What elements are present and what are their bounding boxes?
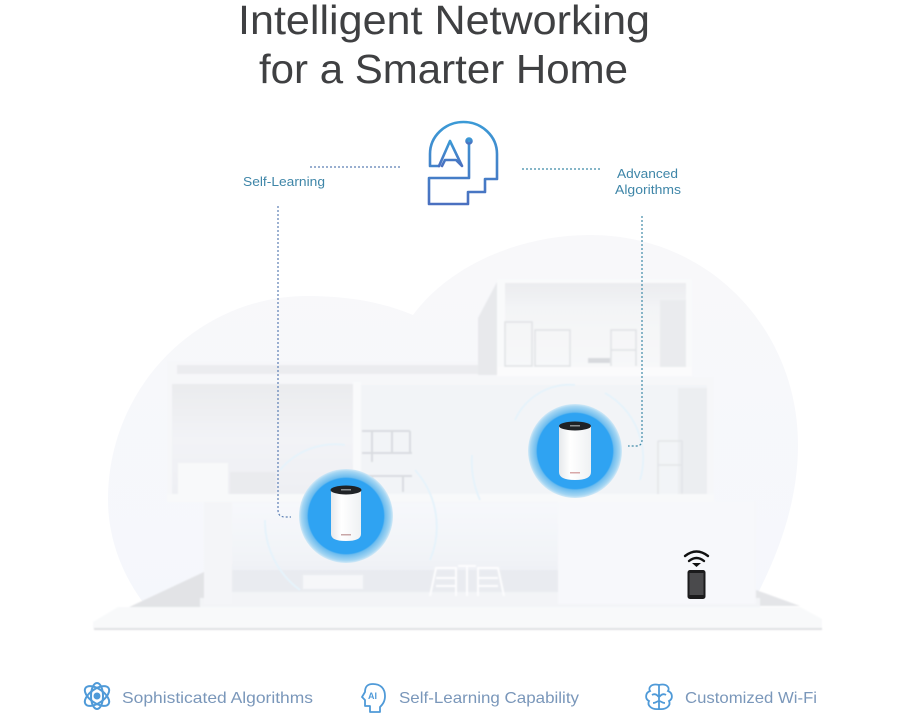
title — [238, 0, 650, 92]
shelves — [362, 431, 412, 492]
top floor — [478, 279, 692, 376]
icon: AI head: AI — [368, 691, 377, 701]
label: Advanced Algorithms — [615, 167, 681, 197]
label: Advanced Algorithms: Advanced — [617, 167, 678, 181]
connector: self-learning — [278, 167, 402, 517]
wifi signal arcs — [265, 385, 643, 590]
feature: Customized Wi-Fi: Customized Wi-Fi — [685, 690, 817, 707]
AI head icon — [429, 122, 497, 204]
ground floor — [204, 501, 756, 604]
base platform — [93, 572, 822, 630]
router: left — [299, 469, 393, 563]
feature: Self-Learning Capability: Self-Learning Capability — [399, 690, 579, 707]
dining furniture — [430, 566, 504, 596]
house — [93, 279, 822, 630]
side shelf — [658, 441, 682, 494]
icon: atom — [82, 682, 112, 710]
feature: Sophisticated Algorithms — [82, 682, 313, 710]
icon: AI head — [362, 684, 385, 712]
phone with wifi icon — [685, 552, 708, 599]
router: right — [528, 404, 622, 498]
middle floor — [167, 361, 714, 502]
title: for a Smarter Home — [259, 46, 628, 92]
connector: advanced algorithms — [522, 169, 642, 446]
cloud background — [108, 235, 798, 622]
icon: brain — [646, 685, 672, 709]
feature: Customized Wi-Fi — [646, 685, 817, 709]
label: Advanced Algorithms: Algorithms — [615, 183, 681, 197]
feature: Self-Learning Capability — [362, 684, 579, 712]
feature: Sophisticated Algorithms: Sophisticated Algorithms — [122, 690, 313, 707]
label: Self-Learning: Self-Learning — [243, 175, 325, 189]
